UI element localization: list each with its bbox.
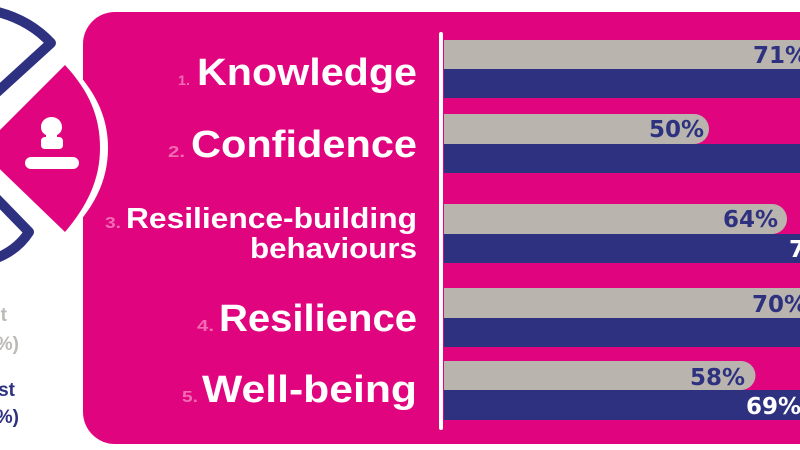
row 5: Well-being: Well-being [202, 369, 417, 411]
icon: person base [25, 157, 79, 169]
row 5: Well-being [182, 361, 800, 420]
bar pre 71 [444, 40, 800, 69]
row 1: Knowledge [178, 40, 800, 98]
row 2: Confidence [168, 114, 800, 173]
bar post [444, 390, 800, 420]
row 4: Resilience: Resilience [219, 298, 417, 340]
row 2: Confidence: 2. [168, 144, 185, 161]
row 3: Resilience-building behaviours: 3. [105, 215, 121, 232]
value 58: 58% [690, 365, 745, 391]
axis line [439, 32, 443, 430]
bar post [444, 144, 800, 173]
row 3: Resilience-building behaviours: behaviours [250, 233, 417, 265]
value 64: 64% [723, 207, 778, 233]
row 5: Well-being: 5. [182, 389, 198, 406]
icon: person head [41, 117, 63, 149]
icon: navy bottom segment outline [0, 196, 29, 259]
row 4: Resilience [197, 288, 800, 347]
icon: navy top segment outline [0, 11, 51, 95]
icon: pink person segment [0, 60, 108, 237]
bar post [444, 234, 800, 263]
row 4: Resilience: 4. [197, 318, 214, 335]
bar pre 64 [444, 204, 787, 234]
legend: pre label: t [1, 305, 8, 326]
bar post [444, 318, 800, 347]
bar pre 70 [444, 288, 800, 318]
row 3: Resilience-building behaviours [105, 203, 800, 265]
row 2: Confidence: Confidence [191, 124, 417, 166]
bar pre 58 [444, 361, 756, 390]
row 1: Knowledge: Knowledge [197, 52, 417, 94]
value 69: 69% [746, 394, 800, 420]
legend: post label [0, 380, 19, 428]
row 1: Knowledge: 1. [178, 72, 190, 88]
row 3: Resilience-building behaviours: Resilience-building [126, 203, 417, 235]
bar post [444, 69, 800, 98]
legend: pre label [0, 305, 19, 355]
value 50: 50% [649, 117, 704, 143]
bar pre 50 [444, 114, 709, 144]
